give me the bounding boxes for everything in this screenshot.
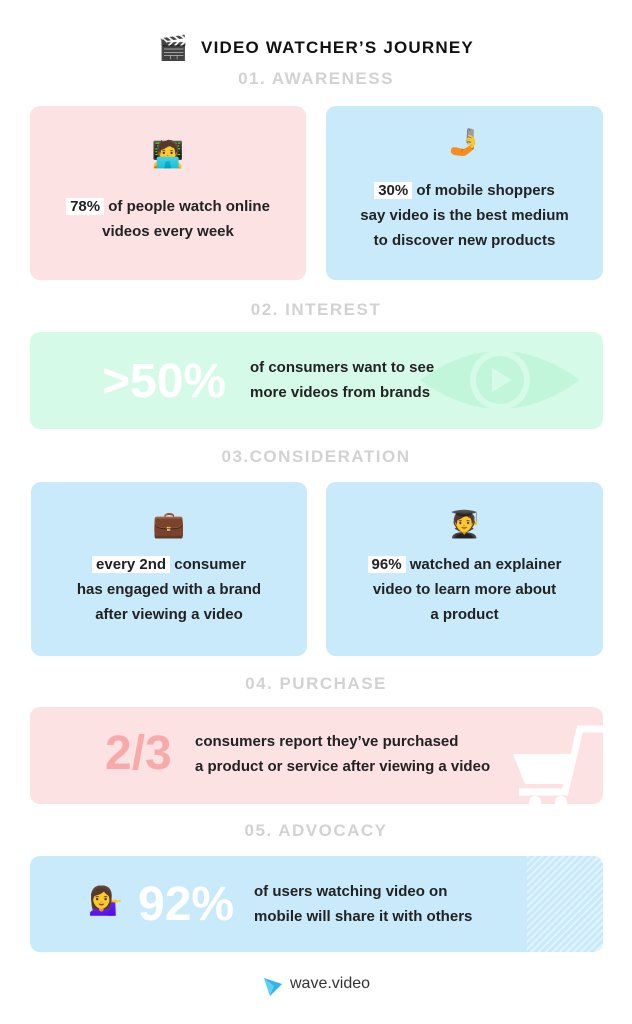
text: a product or service after viewing a video: [195, 758, 490, 775]
text: video to learn more about: [373, 581, 556, 598]
icon: cart: [513, 726, 603, 804]
icon: graduate: 🧑‍🎓: [448, 510, 481, 540]
big number: >50%: [102, 355, 226, 408]
text: a product: [430, 606, 499, 623]
text: 96% watched an explainer: [372, 556, 561, 573]
text: mobile will share it with others: [254, 908, 472, 925]
text: has engaged with a brand: [77, 581, 261, 598]
panel: purchase: [30, 707, 603, 804]
heading: interest: 02. INTEREST: [251, 300, 381, 319]
heading: advocacy: 05. ADVOCACY: [244, 821, 388, 840]
text: [368, 556, 562, 623]
icon: woman tipping hand: 💁‍♀️: [88, 884, 123, 917]
icon: selfie: 🤳: [448, 128, 481, 158]
text: of consumers want to see: [250, 359, 434, 376]
icon: eye with play: [420, 352, 580, 408]
heading: awareness: 01. AWARENESS: [238, 69, 394, 88]
icon: briefcase: 💼: [153, 510, 185, 540]
text: consumers report they’ve purchased: [195, 733, 458, 750]
text: say video is the best medium: [360, 207, 569, 224]
panel: awareness left: [30, 106, 306, 280]
text: to discover new products: [374, 232, 555, 249]
text: [254, 883, 472, 925]
text: every 2nd consumer: [96, 556, 246, 573]
panel: consideration left: [31, 482, 307, 656]
text: 30% of mobile shoppers: [378, 182, 555, 199]
panel: awareness right: [326, 106, 603, 280]
text: of users watching video on: [254, 883, 447, 900]
heading: consideration: 03.CONSIDERATION: [222, 447, 410, 466]
text: [77, 556, 261, 623]
icon: person laptop: 🧑‍💻: [152, 140, 184, 170]
title: 🎬 VIDEO WATCHER’S JOURNEY: [158, 35, 474, 62]
panel: interest: [30, 332, 603, 429]
text: more videos from brands: [250, 384, 430, 401]
text: [250, 359, 434, 401]
logo: [264, 975, 370, 996]
panel: advocacy: [30, 856, 603, 952]
text: [195, 733, 490, 775]
logo text: wave.video: [290, 975, 370, 992]
hatched area: [527, 856, 603, 952]
big number: 92%: [138, 878, 234, 931]
text: [66, 198, 270, 240]
icon: logo mark: [264, 978, 282, 996]
text: [360, 182, 569, 249]
big number: 2/3: [105, 727, 172, 780]
text: 78% of people watch online: [70, 198, 270, 215]
text: videos every week: [102, 223, 234, 240]
text: after viewing a video: [95, 606, 243, 623]
panel: consideration right: [326, 482, 603, 656]
heading: purchase: 04. PURCHASE: [245, 674, 387, 693]
